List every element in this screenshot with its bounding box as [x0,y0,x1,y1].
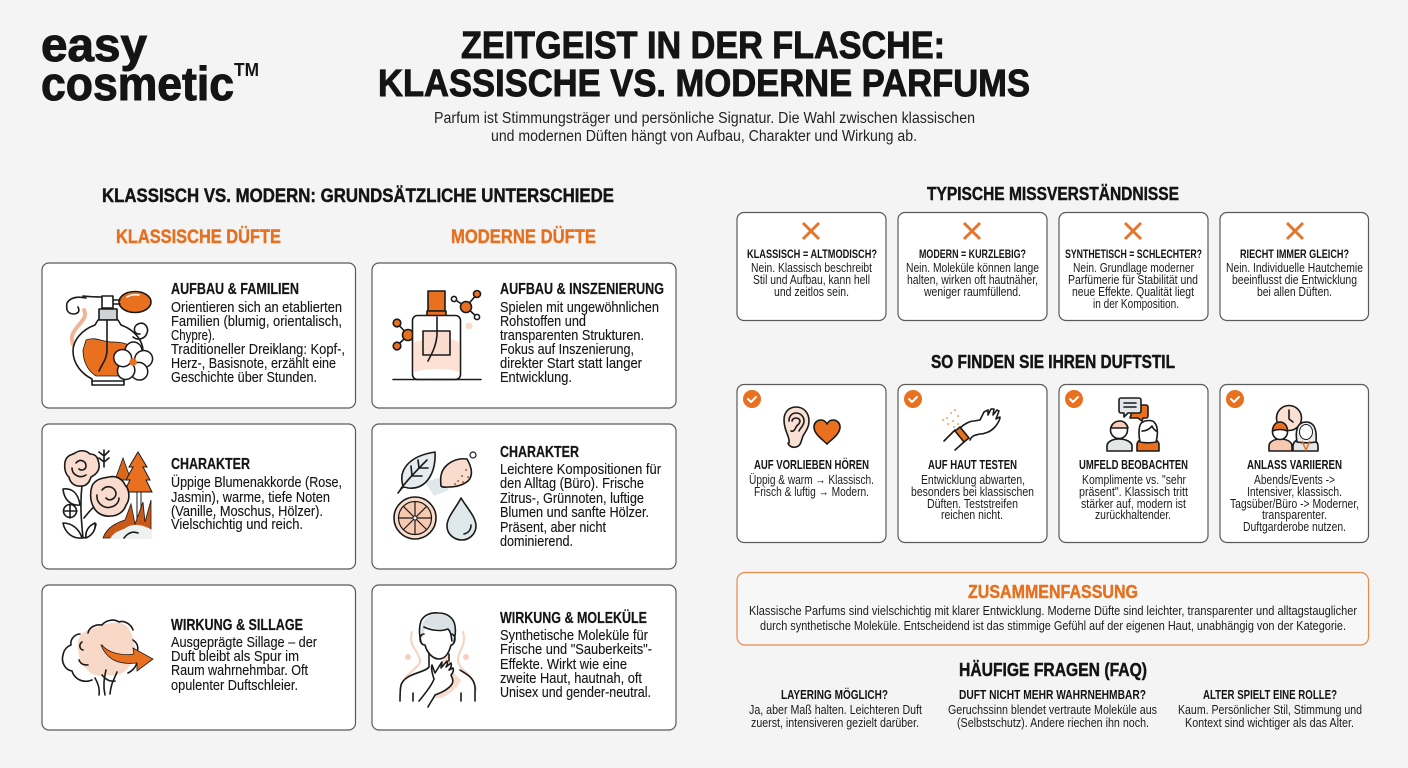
text: Wirkung & Sillage: opulenter Duftschleier. [171,677,298,694]
text: Riecht immer gleich [1226,249,1363,299]
icon: leaf, citrus, water drop [394,452,476,540]
FAQ: Duft nicht mehr wahrnehmbar: (Selbstschutz). Andere riechen ihn noch. [957,716,1149,730]
icon: clock and two people [1269,406,1318,451]
text: Aufbau & Familien: Familien (blumig, orientalisch, [171,313,342,330]
text: Modern = kurzlebig: halten, wirken oft hautnäher, [907,273,1038,287]
text: Synthetisch = schlechter: SYNTHETISCH = SCHLECHTER? [1065,249,1202,261]
icon: cross [964,223,980,239]
text: Charakter modern: Zitrus-, Grünnoten, luftige [500,490,644,507]
text: Klassisch = altmodisch: KLASSISCH = ALTMODISCH? [747,249,877,261]
text: Aufbau & Familien: Herz-, Basisnote, erzählt eine [171,355,336,372]
title [378,25,1030,105]
text: auf Vorlieben hören [749,457,874,499]
text: Anlass variieren: ANLASS VARIIEREN [1247,458,1342,472]
panel: Anlass variieren [1220,384,1368,542]
text: Charakter klassisch: (Vanille, Moschus, Hölzer). [171,503,323,520]
text: Umfeld beobachten: präsent". Klassisch tritt [1079,485,1188,499]
panel: Charakter klassisch [42,424,356,569]
text: Klassisch = altmodisch: Stil und Aufbau, kann hell [753,273,870,287]
panel: Wirkung & Moleküle [372,585,676,730]
icon: classic perfume bottle with flower [67,292,155,385]
FAQ: Layering: zuerst, intensiveren gezielt darüber. [751,716,919,730]
title: KLASSISCHE VS. MODERNE PARFUMS [378,63,1030,105]
text: Aufbau & Inszenierung: direkter Start statt langer [500,355,642,372]
text: Charakter klassisch: CHARAKTER [171,456,250,473]
text: Modern = kurzlebig [906,249,1039,299]
text: auf Vorlieben hören: Üppig & warm → Klassisch. [749,473,874,487]
icon: check badge [743,390,761,408]
panel: Modern = kurzlebig [898,212,1047,320]
text: Wirkung & Sillage: Ausgeprägte Sillage – der [171,634,317,651]
panel: Wirkung & Sillage [42,585,356,730]
text: auf Haut testen: Düften. Teststreifen [927,497,1018,511]
heading: moderne Düfte: MODERNE DÜFTE [451,227,596,248]
text: Charakter modern [500,444,661,550]
text: Modern = kurzlebig: weniger raumfüllend. [923,285,1021,299]
FAQ: Layering: LAYERING MÖGLICH? [781,687,888,702]
text: auf Haut testen: besonders bei klassischen [911,485,1034,499]
FAQ: Alter: Kontext sind wichtiger als das Alter. [1185,716,1354,730]
text: Aufbau & Inszenierung: transparenten Strukturen. [500,327,644,344]
text: Anlass variieren: Duftgarderobe nutzen. [1243,520,1346,534]
text: Aufbau & Familien [171,281,345,386]
icon: modern bottle with molecules [393,290,481,380]
text: Wirkung & Moleküle: zweite Haut, hautnah, oft [500,670,643,687]
panel: auf Vorlieben hören [737,384,886,542]
text: Charakter modern: Blumen und sanfte Hölzer. [500,504,649,521]
text: Aufbau & Familien: AUFBAU & FAMILIEN [171,281,299,298]
text: Synthetisch = schlechter [1065,249,1202,311]
text: Zusammenfassung [749,604,1357,633]
text: Wirkung & Sillage: Raum wahrnehmbar. Oft [171,662,309,679]
FAQ: Layering [749,687,922,730]
text: Charakter modern: Präsent, aber nicht [500,519,607,536]
text: Anlass variieren: Intensiver, klassisch. [1247,485,1342,499]
FAQ: Layering: Ja, aber Maß halten. Leichteren Duft [749,703,922,717]
FAQ: Alter: Kaum. Persönlicher Stil, Stimmung und [1178,703,1362,717]
text: Synthetisch = schlechter: in der Komposition. [1093,297,1179,311]
panel: Umfeld beobachten [1059,384,1208,542]
text: Riecht immer gleich: bei allen Düften. [1257,285,1332,299]
text: Wirkung & Sillage: WIRKUNG & SILLAGE [171,617,303,634]
text: Umfeld beobachten [1079,458,1188,522]
text: Umfeld beobachten: zurückhaltender. [1095,508,1171,522]
text: Riecht immer gleich: Nein. Individuelle Hautchemie [1226,261,1363,275]
icon: wrist with spray [943,409,1000,450]
text: Charakter modern: Leichtere Kompositionen für [500,461,661,478]
panel: Synthetisch = schlechter [1059,212,1208,320]
subtitle: und modernen Düften hängt von Aufbau, Charakter und Wirkung ab. [491,128,917,145]
icon: cross [1125,223,1141,239]
text: Riecht immer gleich: beeinflusst die Entwicklung [1232,273,1357,287]
text: Modern = kurzlebig: MODERN = KURZLEBIG? [919,249,1026,261]
text: Charakter modern: dominierend. [500,533,573,550]
subtitle: Parfum ist Stimmungsträger und persönliche Signatur. Die Wahl zwischen klassischen [434,110,975,127]
text: Synthetisch = schlechter: Nein. Grundlage moderner [1073,261,1194,275]
text: Aufbau & Inszenierung: Spielen mit ungewöhnlichen [500,299,659,316]
panel: auf Haut testen [898,384,1047,542]
text: Anlass variieren: Abends/Events -> [1254,473,1335,487]
heading: klassische Düfte: KLASSISCHE DÜFTE [116,227,281,248]
logo: easy cosmetic: cosmetic [41,57,234,110]
icon: two people talking [1107,398,1159,451]
text: Modern = kurzlebig: Nein. Moleküle können lange [906,261,1039,275]
text: Charakter modern: den Alltag (Büro). Frische [500,475,644,492]
heading: so finden Sie Ihren Duftstil: SO FINDEN SIE IHREN DUFTSTIL [931,352,1175,372]
text: Aufbau & Inszenierung: AUFBAU & INSZENIERUNG [500,281,664,298]
subtitle [434,110,975,145]
text: Synthetisch = schlechter: Parfümerie für Stabilität und [1068,273,1198,287]
FAQ: Duft nicht mehr wahrnehmbar: Geruchssinn blendet vertraute Moleküle aus [948,703,1157,717]
text: Charakter modern: CHARAKTER [500,444,579,461]
text: Aufbau & Inszenierung: Entwicklung. [500,369,572,386]
icon: cross [803,223,819,239]
text: auf Vorlieben hören: AUF VORLIEBEN HÖREN [754,457,869,472]
text: Charakter klassisch: Jasmin), warme, tiefe Noten [171,489,330,506]
text: Aufbau & Inszenierung: Fokus auf Inszenierung, [500,341,634,358]
icon: check badge [904,390,922,408]
logo: easy cosmetic [41,18,259,110]
text: Wirkung & Moleküle: Synthetische Moleküle für [500,627,648,644]
text: auf Haut testen: reichen nicht. [941,508,1003,522]
text: Charakter klassisch: Vielschichtig und reich. [171,516,303,533]
text: Wirkung & Moleküle: WIRKUNG & MOLEKÜLE [500,610,647,627]
logo: easy cosmetic: easy [41,18,147,71]
text: auf Vorlieben hören: Frisch & luftig → Modern. [754,485,869,499]
panel: Klassisch = altmodisch [737,212,886,320]
icon: check badge [1226,390,1244,408]
FAQ: Alter [1178,688,1362,730]
text: Aufbau & Familien: Orientieren sich an etablierten [171,299,342,316]
FAQ: Alter: ALTER SPIELT EINE ROLLE? [1203,688,1337,702]
icon: roses and conifers [63,450,152,539]
heading: grundsätzliche Unterschiede: KLASSISCH VS. MODERN: GRUNDSÄTZLICHE UNTERSCHIEDE [102,186,614,207]
text: Klassisch = altmodisch: Nein. Klassisch beschreibt [751,261,872,275]
text: Umfeld beobachten: Komplimente vs. "sehr [1082,473,1186,487]
title: ZEITGEIST IN DER FLASCHE: [461,25,945,67]
panel: Zusammenfassung [737,572,1368,645]
text: Anlass variieren: Tagsüber/Büro -> Moderner, [1230,497,1359,511]
panel: Aufbau & Familien [42,263,356,408]
panel: Charakter modern [372,424,676,569]
text: Synthetisch = schlechter: neue Effekte. Qualität liegt [1072,285,1194,299]
FAQ: Duft nicht mehr wahrnehmbar: DUFT NICHT MEHR WAHRNEHMBAR? [959,688,1146,702]
panel: Riecht immer gleich [1220,212,1368,320]
text: Aufbau & Familien: Traditioneller Dreiklang: Kopf-, [171,341,345,358]
heading: typische Missverständnisse: TYPISCHE MISSVERSTÄNDNISSE [927,184,1179,204]
text: Klassisch = altmodisch [747,249,877,299]
text: Umfeld beobachten: UMFELD BEOBACHTEN [1079,458,1188,472]
text: auf Haut testen: AUF HAUT TESTEN [928,458,1017,472]
text: Aufbau & Familien: Chypre). [171,327,215,344]
text: Wirkung & Moleküle: Effekte. Wirkt wie eine [500,656,627,673]
text: Anlass variieren: transparenter. [1262,508,1327,522]
text: Riecht immer gleich: RIECHT IMMER GLEICH? [1240,249,1349,261]
icon: check badge [1065,390,1083,408]
text: Charakter klassisch: Üppige Blumenakkorde (Rose, [171,473,342,491]
text: auf Haut testen: Entwicklung abwarten, [921,473,1025,487]
text: Wirkung & Moleküle: Frische und "Sauberkeits"- [500,641,652,658]
logo: easy cosmetic: TM [234,60,259,80]
icon: ear and heart [784,407,840,447]
text: Klassisch = altmodisch: und zeitlos sein. [774,285,849,299]
text: Aufbau & Inszenierung [500,281,664,386]
text: auf Haut testen [911,458,1034,522]
text: Wirkung & Moleküle: Unisex und gender-neutral. [500,684,651,701]
text: Wirkung & Sillage [171,617,317,694]
heading: Zusammenfassung: ZUSAMMENFASSUNG [968,582,1138,602]
text: Aufbau & Inszenierung: Rohstoffen und [500,313,586,330]
text: Anlass variieren [1230,458,1359,534]
text: Umfeld beobachten: stärker auf, modern ist [1081,497,1186,511]
icon: person touching neck [400,613,476,707]
text: Wirkung & Sillage: Duft bleibt als Spur im [171,648,299,665]
icon: cross [1287,223,1303,239]
panel: Aufbau & Inszenierung [372,263,676,408]
text: Charakter klassisch [171,456,342,533]
text: Wirkung & Moleküle [500,610,652,701]
icon: scent cloud with arrow [62,620,153,695]
FAQ: Duft nicht mehr wahrnehmbar [948,688,1157,730]
text: Aufbau & Familien: Geschichte über Stunden. [171,369,317,386]
heading: häufige Fragen: HÄUFIGE FRAGEN (FAQ) [959,660,1147,680]
